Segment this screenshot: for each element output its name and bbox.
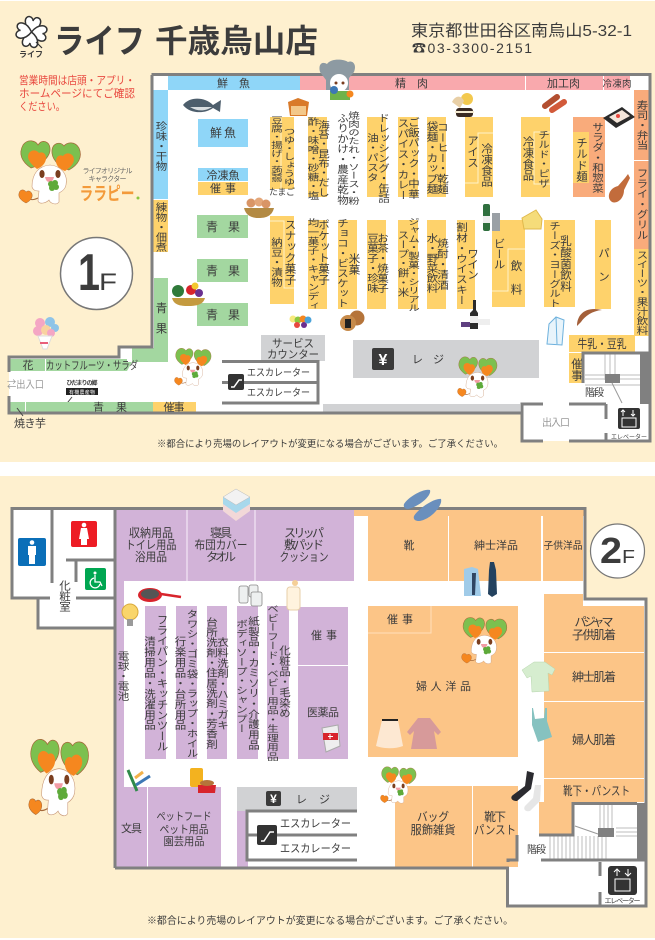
1F east wall sushi and deli: 寿司・弁当 xyxy=(636,99,648,151)
2F stationery: 文具 xyxy=(121,821,142,835)
1F ice shelf: アイス xyxy=(466,135,478,168)
1F chilled shelf: チルド・ピザ xyxy=(537,130,550,188)
1F pocket sweets shelf: ポケット菓子 xyxy=(317,219,330,286)
mascot: gift xyxy=(462,617,507,664)
2F paper goods shelf: ボディソープ・シャンプー xyxy=(235,619,248,733)
1F frozen fish island: 冷凍魚 xyxy=(206,169,240,182)
1F meat wall counter: 冷凍肉 xyxy=(602,78,632,90)
white band between floors xyxy=(0,462,655,476)
1F meat wall counter xyxy=(300,76,632,90)
icon: tank top xyxy=(532,708,552,742)
1F ice shelf: 冷凍食品 xyxy=(480,143,493,187)
icon: stationery xyxy=(128,770,150,791)
1F chocolate shelf xyxy=(336,218,360,309)
1F ice shelf xyxy=(465,117,493,197)
icon: cheese xyxy=(522,210,542,229)
2F orange top strip xyxy=(354,510,584,516)
south checkout strip xyxy=(323,404,520,412)
icon: blouse xyxy=(407,718,441,749)
icon: ice cream xyxy=(452,93,474,117)
1F produce islands: 青 果 xyxy=(206,264,240,278)
2F bedding and storage block: スリッパ xyxy=(284,526,324,540)
1F elevator xyxy=(611,408,647,441)
floor badge 1F: 1 xyxy=(78,244,100,302)
2F womenswear: 催 事 xyxy=(387,613,413,626)
mascot: large clover xyxy=(29,739,89,816)
icon: bouquet xyxy=(33,317,59,349)
icon: miso xyxy=(288,98,309,116)
2F household shelf: タワシ・ゴミ袋・ラップ・ホイル xyxy=(186,609,198,758)
1F seaweed shelf: 海苔・昆布・だし xyxy=(317,119,330,197)
1F tofu shelf: 豆腐・揚げ・蒟蒻 xyxy=(270,116,283,182)
icon: medicine box xyxy=(322,725,340,752)
2F bedding and storage block: タオル xyxy=(206,550,236,564)
character caption: ライフオリジナル xyxy=(82,167,132,175)
icon: pet food xyxy=(190,768,216,793)
1F register xyxy=(353,340,539,378)
1F seaweed shelf xyxy=(306,116,330,200)
2F elevator xyxy=(604,866,640,905)
1F produce left wall xyxy=(132,278,168,362)
2F household shelf: 行楽用品・台所用品 xyxy=(174,636,186,730)
1F service counter: サービス xyxy=(272,337,314,350)
2F restroom walls xyxy=(52,509,115,598)
1F meat wall counter: 精 肉 xyxy=(395,77,428,90)
2F pet food: ペット用品 xyxy=(160,823,208,836)
icon: eggs xyxy=(244,198,274,218)
2F womenswear: 婦 人 洋 品 xyxy=(416,679,471,693)
1F deli shelf: チルド麺 xyxy=(575,137,588,183)
1F rice pack shelf: スパイス・カレー xyxy=(396,118,409,200)
2F bedding and storage block: 敷パッド xyxy=(284,538,324,552)
logo: clover xyxy=(16,16,47,59)
1F frozen fish island: 催 事 xyxy=(210,182,236,195)
opening hours note: ください。 xyxy=(19,100,65,113)
icon: men's restroom xyxy=(18,538,46,566)
2F socks counter xyxy=(473,786,518,867)
1F fish wall counter: 鮮 魚 xyxy=(217,76,250,90)
icon: croissant xyxy=(577,309,602,326)
2F store walls xyxy=(12,508,646,906)
mascot: checkout xyxy=(458,357,497,397)
1F chilled shelf: 冷凍食品 xyxy=(522,136,534,181)
1F wine shelf xyxy=(455,220,478,309)
1F tea shelf: お茶・焼菓子 xyxy=(376,233,389,294)
2F detergent shelf: 台所洗剤・住居洗剤・芳香剤 xyxy=(205,616,218,750)
1F sauce shelf xyxy=(336,111,360,205)
1F wine shelf: 割材・ウイスキー xyxy=(455,222,468,305)
mascot: rarapi xyxy=(19,141,80,204)
store address and phone: 東京都世田谷区南烏山5-32-1 xyxy=(411,22,632,40)
1F east wall sushi and deli xyxy=(634,90,649,336)
2F bulbs wall xyxy=(116,581,129,787)
2F baby goods shelf xyxy=(266,604,291,761)
icon: baby bottle xyxy=(287,580,300,610)
2F pet food: 園芸用品 xyxy=(164,835,204,848)
1F chilled shelf xyxy=(521,117,550,197)
2F stair walls xyxy=(508,804,645,862)
2F register: レ ジ xyxy=(296,794,330,806)
2F escalators: エスカレーター xyxy=(280,817,351,830)
1F milk counter: 牛乳・豆乳 xyxy=(578,336,626,351)
character caption: ララピー xyxy=(80,184,134,204)
2F event and pharmacy: 催 事 xyxy=(311,629,337,642)
1F stairs xyxy=(585,353,650,404)
1F south produce wall xyxy=(10,401,153,414)
2F socks counter: 靴下 xyxy=(484,810,506,824)
2F pet food: ペットフード xyxy=(156,811,212,823)
1F pocket sweets shelf xyxy=(306,217,330,310)
1F produce islands: 青 果 xyxy=(206,220,240,234)
1F lower lobby walls xyxy=(522,353,650,441)
2F bulbs wall: 電球・電池 xyxy=(116,651,129,701)
icon: chicken leg xyxy=(609,174,630,202)
1F beer shelf: ビール xyxy=(492,238,504,270)
2F cleaning shelf: フライパン・キッチンツール xyxy=(156,614,168,752)
2F kidswear xyxy=(543,510,583,606)
1F water shelf: 水・野菜飲料 xyxy=(426,233,438,294)
character caption xyxy=(80,167,140,204)
1F himawari sign xyxy=(64,379,98,407)
2F bags xyxy=(395,786,472,867)
1F snack shelf xyxy=(270,216,296,304)
2F escalators xyxy=(247,811,357,860)
store address and phone xyxy=(411,22,632,56)
1F fish island xyxy=(198,119,248,147)
1F himawari sign: 有機農産物 xyxy=(69,389,95,396)
1F dressing shelf: ドレッシング・缶詰 xyxy=(377,113,390,204)
1F south produce wall: 青 果 xyxy=(93,401,127,414)
2F escalators: エスカレーター xyxy=(280,842,351,855)
2F stairs xyxy=(527,803,645,860)
1F store floor xyxy=(9,75,650,441)
icon: skirt xyxy=(376,719,403,748)
2F socks counter: パンスト xyxy=(474,823,516,837)
1F rice pack shelf xyxy=(396,117,420,200)
1F jam shelf: ジャム・製菓・シリアル xyxy=(407,217,420,312)
mascot: wink xyxy=(380,767,416,803)
notice 1F: ※都合により売場のレイアウトが変更になる場合がございます。ご了承ください。 xyxy=(157,438,503,450)
2F bags: 服飾雑貨 xyxy=(410,822,456,837)
icon: socks xyxy=(511,771,541,811)
1F east wall sushi and deli: スイーツ・果汁飲料 xyxy=(636,250,648,336)
1F event counter east xyxy=(569,353,583,383)
2F paper goods shelf xyxy=(235,606,260,759)
2F event and pharmacy: 医薬品 xyxy=(307,706,339,719)
1F dressing shelf xyxy=(366,113,390,204)
1F chocolate shelf: チョコ・ビスケット xyxy=(336,218,349,308)
2F womenswear xyxy=(368,606,518,757)
floor badge 2F xyxy=(590,524,644,578)
1F wine shelf: ワイン xyxy=(466,248,478,280)
2F register xyxy=(237,787,357,811)
1F east wall sushi and deli: フライ・グリル xyxy=(636,168,648,240)
floor plan 2F xyxy=(12,508,646,906)
2F paper goods shelf: 紙製品・カミソリ・介護用品 xyxy=(247,615,260,750)
floor plan 1F xyxy=(7,74,650,441)
2F bedding and storage block: 寝具 xyxy=(210,526,232,540)
1F produce islands xyxy=(197,215,248,326)
label: baked sweet potato xyxy=(14,408,46,430)
1F tofu shelf: つゆ・しょうゆ xyxy=(282,127,294,186)
2F register: ¥ xyxy=(270,792,277,806)
1F deli shelf xyxy=(573,117,605,197)
1F dairy shelf: チーズ・ヨーグルト xyxy=(548,221,561,308)
1F rice pack shelf: ご飯パック・中華 xyxy=(407,117,420,199)
1F coffee shelf: コーヒー・乾麺 xyxy=(436,122,449,195)
1F water shelf xyxy=(426,220,449,309)
title: ライフ xyxy=(54,23,145,61)
floor badge 2F: F xyxy=(622,547,635,567)
2F elevator divider xyxy=(598,862,602,906)
logo: clover: ライフ xyxy=(19,50,43,59)
1F coffee shelf xyxy=(426,117,449,197)
1F left wall delicacies: 珍味・干物 xyxy=(154,121,167,171)
2F event and pharmacy xyxy=(298,607,348,759)
1F store walls xyxy=(9,74,650,441)
2F bedding and storage block xyxy=(116,510,354,581)
1F bread shelf: パ ン xyxy=(597,247,610,282)
2F baby goods shelf: ベビーフード・ベビー用品・生理用品 xyxy=(266,604,279,761)
icon: t-shirt xyxy=(522,662,555,692)
opening hours note: 営業時間は店頭・アプリ・ xyxy=(19,73,135,87)
1F tea shelf xyxy=(366,220,389,309)
1F jam shelf: スープ・餅・米 xyxy=(396,230,409,298)
2F menswear: 紳士洋品 xyxy=(474,538,518,552)
1F event counter east: 催事 xyxy=(570,358,583,381)
2F detergent shelf: 衣料洗剤・ハミガキ xyxy=(216,637,229,730)
2F bedding and storage block: 収納用品 xyxy=(129,525,173,540)
2F bedding and storage block: トイレ用品 xyxy=(126,538,176,552)
1F flower and fruit counter: カットフルーツ・サラダ xyxy=(46,358,138,372)
1F dairy shelf xyxy=(544,220,575,308)
1F service counter xyxy=(261,335,325,361)
1F snack shelf: 納豆・漬物 xyxy=(270,236,283,287)
1F sauce shelf: ふりかけ・農産乾物 xyxy=(336,113,349,205)
1F water shelf: 焼酎・清酒 xyxy=(436,238,449,291)
1F frozen fish island xyxy=(198,168,248,195)
2F elevator: エレベーター xyxy=(604,896,640,905)
2F baby goods shelf: 化粧品・毛染め xyxy=(278,645,291,718)
mascot: shopping basket xyxy=(174,348,211,386)
1F south event wall xyxy=(153,401,196,414)
1F flower and fruit counter xyxy=(10,358,138,372)
2F right wall apparel: 靴下・パンスト xyxy=(563,784,630,798)
icon: vegetable basket xyxy=(172,282,205,306)
label: baked sweet potato: 焼き芋 xyxy=(14,417,46,430)
1F himawari sign: ひだまりの郷 xyxy=(66,379,98,387)
1F entrance east: 出入口 xyxy=(542,417,570,429)
2F bedding and storage block: クッション xyxy=(280,550,328,564)
icon: frying pan xyxy=(138,588,181,602)
2F right wall apparel: 紳士肌着 xyxy=(572,669,616,684)
2F stationery xyxy=(116,787,147,867)
icon: shoes xyxy=(404,490,441,521)
icon: women's restroom xyxy=(71,521,97,547)
1F escalators xyxy=(222,362,318,403)
opening hours note xyxy=(19,73,135,113)
1F escalators: エスカレーター xyxy=(247,387,310,399)
mascot: elephant costume xyxy=(319,60,355,100)
1F produce left wall: 青 果 xyxy=(154,302,167,335)
1F produce islands: 青 果 xyxy=(206,308,240,322)
1F stairs: 階段 xyxy=(585,386,604,399)
2F shoes xyxy=(368,516,448,581)
2F right wall apparel: 子供肌着 xyxy=(572,627,616,642)
2F bags: バッグ xyxy=(417,810,449,824)
icon: light bulb xyxy=(122,604,138,626)
1F elevator: エレベーター xyxy=(611,433,647,441)
notice 2F: ※都合により売場のレイアウトが変更になる場合がございます。ご了承ください。 xyxy=(147,914,513,927)
2F shoes: 靴 xyxy=(404,538,414,552)
1F tofu shelf xyxy=(269,116,295,197)
icon: candies xyxy=(290,316,312,328)
1F escalators: エスカレーター xyxy=(247,367,310,379)
2F right wall apparel: パジャマ xyxy=(574,615,614,629)
icon: milk carton xyxy=(547,317,564,345)
title: 千歳烏山店 xyxy=(155,23,318,59)
1F bread shelf xyxy=(595,220,611,309)
1F snack shelf: スナック菓子 xyxy=(284,219,296,286)
title xyxy=(54,23,318,61)
2F right wall apparel xyxy=(539,606,644,834)
1F south event wall: 催事 xyxy=(164,401,184,414)
1F deli shelf: サラダ・和惣菜 xyxy=(591,122,604,194)
2F powder room label: 化粧室 xyxy=(58,580,71,612)
2F cleaning shelf xyxy=(143,606,168,759)
1F milk counter xyxy=(569,335,635,352)
1F meat wall counter: 加工肉 xyxy=(547,77,580,90)
1F chocolate shelf: 米菓 xyxy=(348,253,360,275)
1F flower and fruit counter: 花 xyxy=(22,359,34,372)
icon: futon xyxy=(223,489,250,521)
icon: fish xyxy=(183,99,221,112)
2F kidswear: 子供洋品 xyxy=(544,539,582,552)
character caption: キャラクター xyxy=(88,174,126,183)
2F bedding and storage block: 浴用品 xyxy=(135,550,167,564)
icon: sausages xyxy=(545,97,564,110)
2F household shelf xyxy=(174,606,198,759)
opening hours note: ホームページにてご確認 xyxy=(19,86,135,100)
icon: shirt and tie xyxy=(464,562,497,597)
2F stairs: 階段 xyxy=(527,843,546,856)
2F pet food xyxy=(148,787,248,867)
icon: toilet paper xyxy=(239,585,262,606)
icon: accessible restroom xyxy=(85,568,106,590)
store address and phone: ☎03-3300-2151 xyxy=(412,40,532,56)
2F cleaning shelf: 清掃用品・洗濯用品 xyxy=(143,636,156,730)
icon: sushi tray xyxy=(603,107,635,128)
icon: beer xyxy=(483,204,500,231)
2F bedding and storage block: 布団カバー xyxy=(194,538,248,552)
2F store floor xyxy=(12,509,646,906)
1F seaweed shelf: 酢・味噌・砂糖・塩 xyxy=(306,116,319,200)
1F fish wall counter xyxy=(168,76,300,90)
2F menswear xyxy=(449,516,541,581)
1F sauce shelf: 焼肉のたれ・ソース・粉 xyxy=(347,111,360,205)
1F left wall delicacies xyxy=(153,90,168,199)
1F coffee shelf: 袋麺・カップ麺 xyxy=(426,120,438,195)
2F detergent shelf xyxy=(205,606,229,759)
1F pocket sweets shelf: 均一菓子・キャンディ xyxy=(306,217,319,310)
1F dairy shelf: 乳酸菌飲料 xyxy=(559,235,572,293)
icon: rice crackers xyxy=(340,310,364,331)
1F fish island: 鮮 魚 xyxy=(210,126,236,140)
1F beer shelf: 飲 料 xyxy=(510,259,522,296)
1F jam shelf xyxy=(396,217,420,312)
1F dressing shelf: 油・パスタ xyxy=(366,132,379,182)
floor badge 1F xyxy=(60,238,132,310)
1F left wall pickles xyxy=(153,200,168,253)
floor badge 1F: F xyxy=(99,269,117,296)
1F register: ¥ xyxy=(379,352,388,369)
2F right wall apparel: 婦人肌着 xyxy=(572,732,616,747)
floor badge 2F: 2 xyxy=(600,530,622,571)
1F service counter: カウンター xyxy=(267,348,319,361)
1F tea shelf: 豆菓子・珍味 xyxy=(366,233,379,293)
1F left wall pickles: 練物・佃煮 xyxy=(154,201,167,253)
1F tofu shelf: たまご xyxy=(269,186,295,197)
icon: wine xyxy=(461,300,490,329)
1F register: レ ジ xyxy=(412,354,444,366)
1F entrance west: ⇄出入口 xyxy=(7,379,44,391)
1F beer shelf xyxy=(492,220,525,307)
